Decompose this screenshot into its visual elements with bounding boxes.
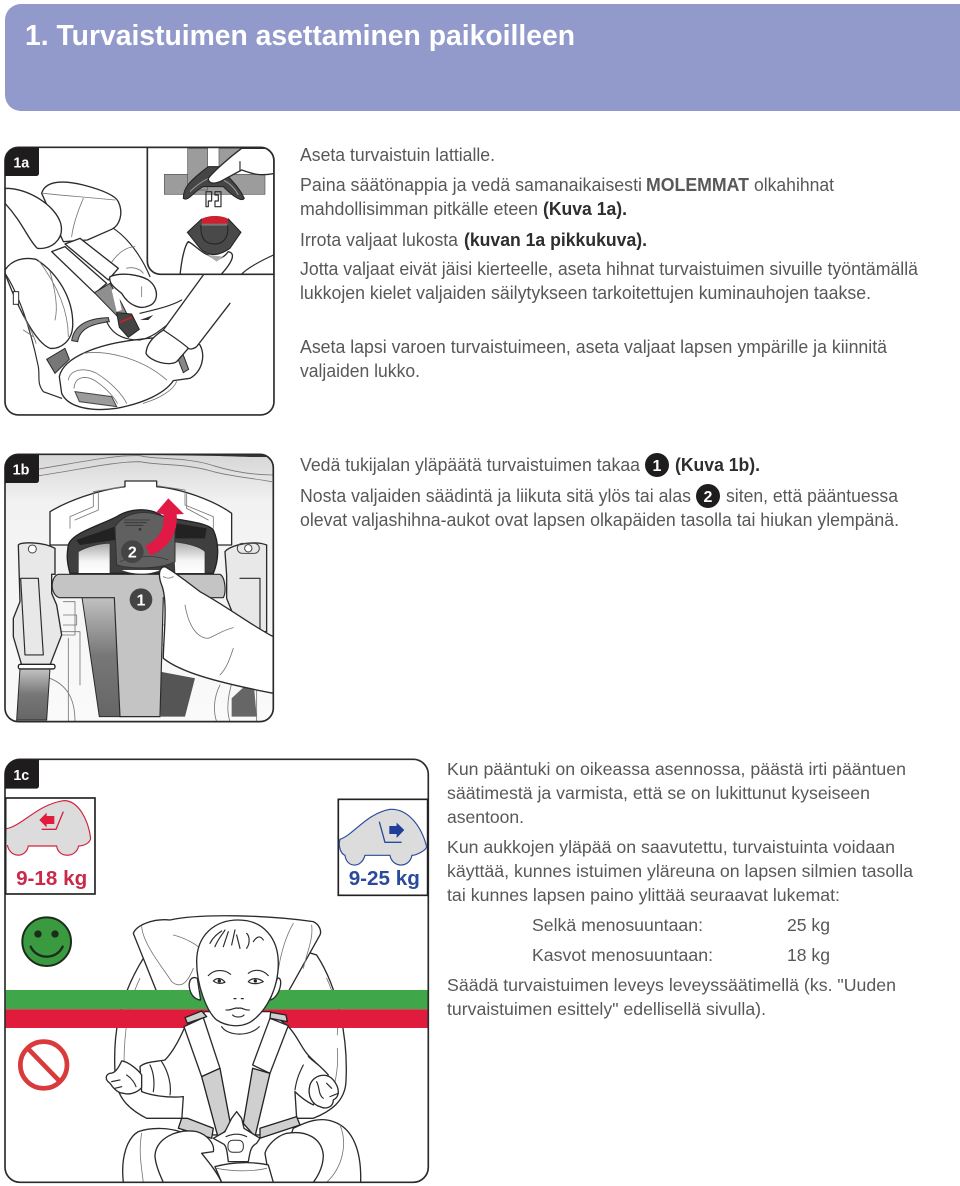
text block 1a: Paina säätönappia ja vedä samanaikaisesti [300,175,642,195]
side guides [13,543,62,665]
hair [210,930,263,948]
text block 1a: Aseta turvaistuin lattialle. [300,145,495,165]
text block 1c: Kun aukkojen yläpää on saavutettu, turvaistuinta voidaan [447,837,895,857]
left lower belt [17,668,50,720]
red arrow [145,498,184,556]
buckle [213,1112,260,1162]
text block 1b: Vedä tukijalan yläpäätä turvaistuimen takaa [300,455,641,475]
text block 1c: Säädä turvaistuimen leveys leveyssäätimellä (ks. "Uuden [447,975,896,995]
text block 1c: 18 kg [787,945,830,965]
text block 1a: (Kuva 1a). [543,199,627,219]
badge 1c [5,759,39,789]
marker 2: 2 [128,544,137,561]
inset 1a [147,147,275,276]
legs [155,1131,222,1182]
buckle [117,313,139,337]
text block 1a: MOLEMMAT [646,175,749,195]
text block 1b: siten, että pääntuessa [726,486,899,506]
marker 1: 1 [137,592,146,609]
text block 1a: Jotta valjaat eivät jäisi kierteelle, aseta hihnat turvaistuimen sivuille työntämällä [300,259,919,279]
text block 1c [447,759,913,1019]
text block 1b: olevat valjashihna-aukot ovat lapsen olkapäiden tasolla tai hiukan ylempänä. [300,510,899,530]
text block 1a: Irrota valjaat lukosta [300,230,459,250]
text block 1a: Aseta lapsi varoen turvaistuimeen, aseta valjaat lapsen ympärille ja kiinnitä [300,337,888,357]
harness straps [65,238,118,280]
title: 1. Turvaistuimen asettaminen paikoilleen [25,20,575,52]
lower seat contours [50,602,257,722]
text block 1c: Kasvot menosuuntaan: [532,945,713,965]
side cushions [122,1128,180,1182]
center shoulder belts [82,595,121,717]
text block 1b: 1 [653,458,662,475]
harness slider [67,510,218,573]
face [208,970,268,976]
text block 1c: asentoon. [447,807,524,827]
text block 1a: valjaiden lukko. [300,361,420,381]
panel: illustration 1a [5,147,275,415]
badge 1c: 1c [13,768,29,784]
height bands [5,990,428,1028]
badge 1a [5,147,39,176]
text block 1c: käyttää, kunnes istuimen yläreuna on lapsen silmien tasolla [447,861,913,881]
text block 1b: 2 [704,489,713,506]
seat behind child [115,916,346,1118]
shoulder straps [184,1018,220,1077]
icon: rear facing 9-18 kg: 9-18 kg [16,867,87,890]
backrest frame [49,480,232,546]
headrest pull T-handle [52,574,225,717]
text block 1c: 25 kg [787,915,830,935]
icon: forward facing 9-25 kg [338,799,428,895]
icon: prohibition sign [20,1042,67,1088]
icon: green smiley [22,917,71,966]
panel: illustration 1c [5,759,428,1182]
text block 1c: Kun pääntuki on oikeassa asennossa, päästä irti pääntuen [447,759,906,779]
left hand [106,1061,142,1094]
icon: forward facing 9-25 kg: 9-25 kg [349,867,420,890]
panel: illustration 1b [5,454,273,722]
ears [189,978,201,1000]
base of seat [59,338,203,409]
right hand [309,1075,338,1108]
text block 1a: mahdollisimman pitkälle eteen [300,199,538,219]
text block 1a: olkahihnat [754,175,834,195]
badge 1b [5,454,39,483]
marker 1 [130,588,152,611]
head [197,920,278,1026]
text block 1c: tai kunnes lapsen paino ylittää seuraavat lukemat: [447,885,840,905]
child figure [106,920,361,1182]
arm and hand [146,275,230,364]
text block 1c: Selkä menosuuntaan: [532,915,703,935]
hand pulling handle [159,567,273,693]
marker 2 [121,540,144,563]
text block 1a [300,145,919,381]
header banner [5,4,960,111]
text block 1a: (kuvan 1a pikkukuva). [464,230,647,250]
badge 1b: 1b [13,463,30,479]
icon: rear facing 9-18 kg [6,798,95,894]
torso and arms [140,1012,328,1135]
text block 1b [300,453,899,530]
text block 1a: lukkojen kielet valjaiden säilytykseen tarkoitettujen kuminauhojen taakse. [300,283,871,303]
badge 1a: 1a [13,156,30,172]
text block 1c: säätimestä ja varmista, että se on lukittunut kyseiseen [447,783,870,803]
text block 1b: Nosta valjaiden säädintä ja liikuta sitä ylös tai alas [300,486,691,506]
text block 1c: turvaistuimen esittely" edellisellä sivulla). [447,999,766,1019]
text block 1b: (Kuva 1b). [675,455,760,475]
